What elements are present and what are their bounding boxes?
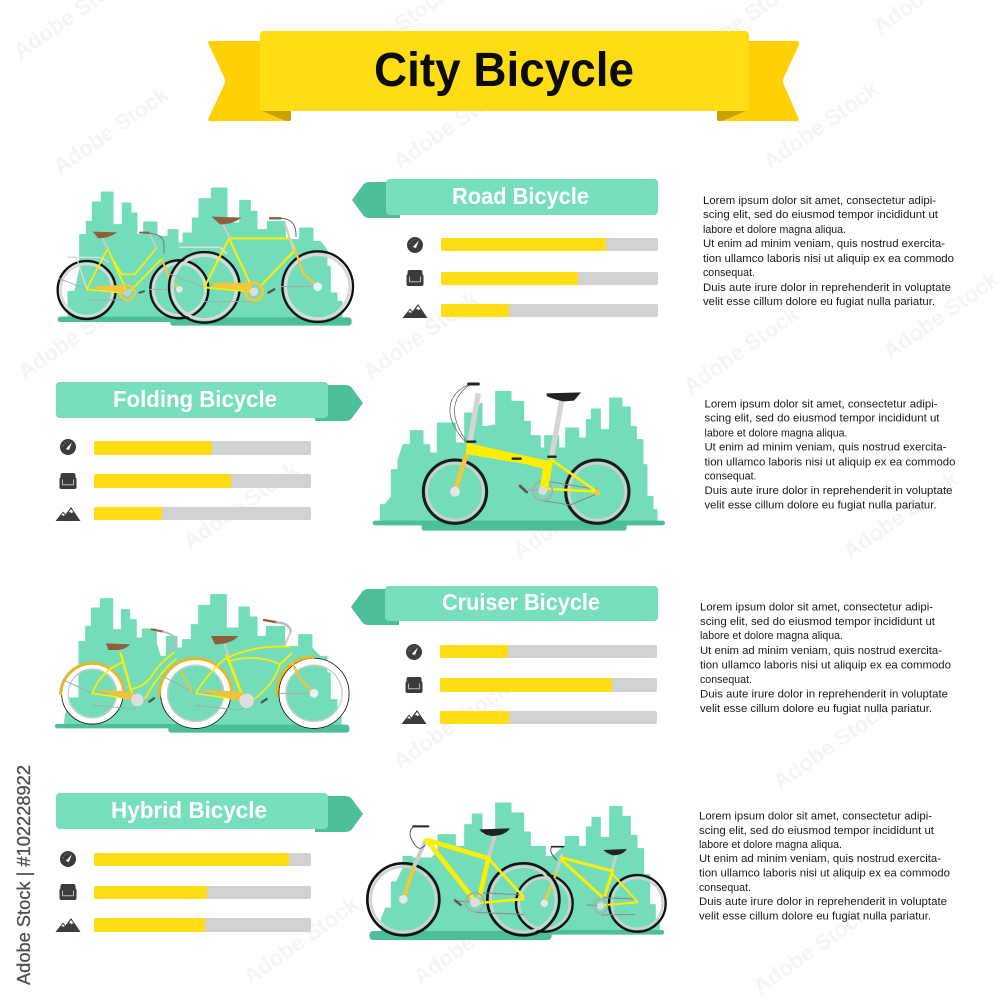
skyline	[381, 392, 657, 522]
bike: men's cruiser	[159, 620, 349, 728]
watermark: Adobe Stock	[179, 456, 304, 554]
description: cruiser: scing elit, sed do eiusmod tempor incididunt ut	[700, 616, 935, 628]
bike: small hybrid	[516, 847, 666, 932]
header: road bicycle: Road Bicycle	[452, 183, 589, 209]
description: hybrid: scing elit, sed do eiusmod tempor incididunt ut	[699, 825, 934, 837]
description: cruiser: tion ullamco laboris nisi ut aliquip ex ea commodo	[700, 660, 951, 672]
description: folding: Duis aute irure dolor in reprehenderit in voluptate	[704, 485, 953, 497]
description: road: tion ullamco laboris nisi ut aliquip ex ea commodo	[703, 253, 954, 265]
skyline	[382, 803, 659, 932]
bike: ladies road	[58, 233, 208, 319]
watermark: Adobe Stock	[509, 466, 634, 564]
description: folding: Ut enim ad minim veniam, quis nostrud exercita-	[704, 442, 947, 454]
skyline	[68, 188, 342, 317]
hybrid bicycles illustration	[367, 803, 666, 940]
header: folding bicycle: Folding Bicycle	[113, 386, 277, 412]
watermark: Adobe Stock	[239, 891, 364, 989]
description: hybrid: Duis aute irure dolor in reprehenderit in voluptate	[699, 896, 947, 908]
watermark: Adobe Stock	[679, 301, 804, 399]
description: road: velit esse cillum dolore eu fugiat nulla pariatur.	[703, 296, 935, 308]
description: folding	[704, 398, 956, 512]
description: folding: consequat.	[704, 470, 756, 482]
description: cruiser	[700, 602, 951, 715]
description: road: consequat.	[703, 267, 755, 279]
description: road: Duis aute irure dolor in reprehenderit in voluptate	[703, 282, 951, 294]
ground	[373, 521, 665, 525]
ribbon folds	[262, 111, 746, 121]
header: cruiser bicycle	[351, 586, 658, 625]
description: cruiser: consequat.	[700, 674, 752, 686]
ground	[58, 317, 191, 322]
header: road bicycle	[352, 179, 658, 218]
description: hybrid	[699, 810, 950, 922]
description: hybrid: Ut enim ad minim veniam, quis nostrud exercita-	[699, 853, 941, 865]
watermark: Adobe Stock	[409, 891, 534, 989]
watermark: Adobe Stock	[879, 266, 1000, 364]
description: folding: velit esse cillum dolore eu fugiat nulla pariatur.	[704, 500, 936, 512]
panel: road bicycle	[58, 179, 954, 326]
watermark: Adobe Stock	[49, 81, 174, 179]
watermark: Adobe Stock	[749, 901, 874, 999]
description: road: labore et dolore magna aliqua.	[703, 224, 846, 236]
cruiser bicycles illustration	[55, 595, 349, 733]
description: hybrid: velit esse cillum dolore eu fugiat nulla pariatur.	[699, 910, 931, 922]
description: hybrid: consequat.	[699, 882, 751, 894]
watermark: Adobe Stock	[389, 676, 514, 774]
left ribbon tail	[208, 41, 290, 121]
description: cruiser: Lorem ipsum dolor sit amet, consectetur adipi-	[700, 602, 934, 614]
road bicycles illustration	[58, 188, 353, 326]
description: folding: tion ullamco laboris nisi ut aliquip ex ea commodo	[704, 456, 956, 468]
description: cruiser: Ut enim ad minim veniam, quis nostrud exercita-	[700, 645, 942, 657]
description: road: Lorem ipsum dolor sit amet, consectetur adipi-	[703, 195, 937, 207]
rating bars: cruiser	[402, 644, 657, 724]
description: hybrid: Lorem ipsum dolor sit amet, consectetur adipi-	[699, 810, 933, 822]
ground	[55, 724, 178, 728]
skyline	[65, 595, 341, 724]
panel: folding bicycle	[56, 382, 956, 531]
watermark: Adobe Stock	[359, 286, 484, 384]
watermark: Adobe Stock	[389, 76, 514, 174]
description: folding: labore et dolore magna aliqua.	[704, 428, 848, 440]
description: folding: scing elit, sed do eiusmod tempor incididunt ut	[704, 412, 940, 424]
description: road	[703, 195, 954, 308]
bike: large hybrid	[367, 826, 559, 935]
watermark: Adobe Stock	[769, 696, 894, 794]
header: hybrid bicycle: Hybrid Bicycle	[111, 797, 267, 823]
ground	[369, 931, 552, 940]
bike: men's road	[168, 218, 353, 323]
header: hybrid bicycle	[56, 793, 363, 832]
right ribbon tail	[720, 41, 799, 121]
header: folding bicycle	[56, 382, 363, 421]
description: hybrid: tion ullamco laboris nisi ut aliquip ex ea commodo	[699, 868, 950, 880]
watermark: Adobe Stock	[14, 286, 139, 384]
watermark: Adobe Stock	[839, 466, 964, 564]
rating bars: road	[402, 237, 658, 318]
folding bike	[423, 384, 629, 523]
description: cruiser: labore et dolore magna aliqua.	[700, 630, 843, 642]
header: cruiser bicycle: Cruiser Bicycle	[442, 589, 600, 615]
stock id side text: Adobe Stock | #102228922	[14, 765, 34, 985]
description: road: Ut enim ad minim veniam, quis nostrud exercita-	[703, 238, 945, 250]
title banner	[208, 31, 799, 121]
description: cruiser: velit esse cillum dolore eu fugiat nulla pariatur.	[700, 703, 932, 715]
description: hybrid: labore et dolore magna aliqua.	[699, 839, 842, 851]
folding bicycle illustration	[373, 384, 665, 531]
rating bars: hybrid	[56, 851, 311, 932]
panel: hybrid bicycle	[56, 793, 950, 940]
panel: cruiser bicycle	[55, 586, 951, 733]
description: folding: Lorem ipsum dolor sit amet, consectetur adipi-	[704, 398, 938, 410]
bike: ladies cruiser	[61, 629, 176, 724]
description: road: scing elit, sed do eiusmod tempor incididunt ut	[703, 209, 938, 221]
ribbon main band	[260, 31, 749, 111]
rating bars: folding	[56, 439, 311, 521]
title text: City Bicycle	[374, 44, 634, 97]
watermark: Adobe Stock	[759, 76, 884, 174]
description: cruiser: Duis aute irure dolor in reprehenderit in voluptate	[700, 688, 948, 700]
